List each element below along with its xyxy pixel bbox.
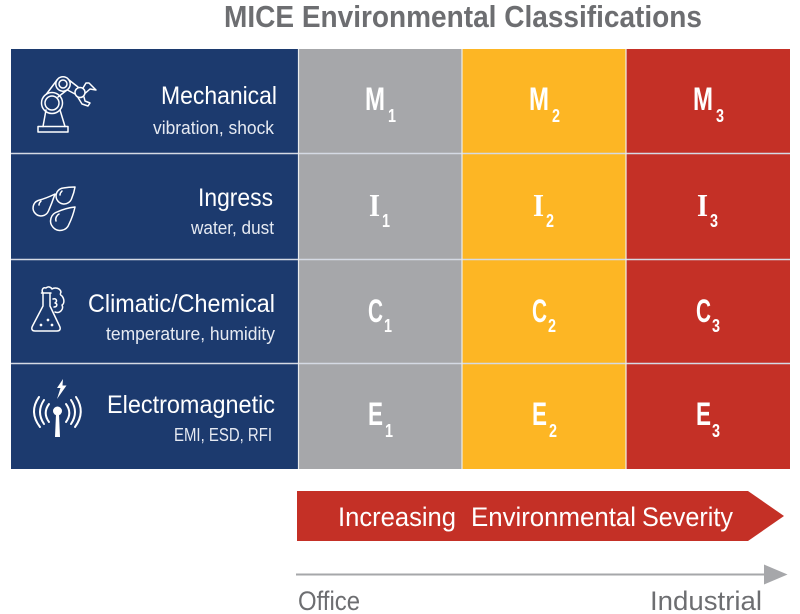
cell: I1: 1 — [382, 211, 390, 231]
cell: M3: M — [693, 81, 713, 117]
icon: flask — [32, 287, 64, 331]
cell: E3: 3 — [712, 421, 720, 441]
sublabel: water, dust: water, dust — [190, 218, 274, 238]
icon: antenna with lightning — [34, 379, 81, 437]
cell: I1 — [369, 187, 390, 231]
row: climatic/chemical — [32, 287, 275, 344]
cell: E3: E — [696, 396, 711, 432]
cell: E1: 1 — [385, 421, 393, 441]
cell: C2: 2 — [548, 316, 556, 336]
row: mechanical — [38, 77, 277, 138]
arrow: increasing environmental severity: Environmental — [471, 502, 636, 532]
icon: water drops — [33, 187, 75, 230]
row: ingress — [33, 184, 274, 238]
cell: I1: I — [369, 187, 380, 223]
column: level 1 — [298, 49, 462, 469]
sublabel: vibration, shock: vibration, shock — [153, 118, 275, 138]
arrow: increasing environmental severity: Increasing — [338, 502, 456, 532]
cell: I2: 2 — [546, 211, 554, 231]
cell: C1: 1 — [384, 316, 392, 336]
cell: I3 — [697, 187, 718, 231]
cell: C3: C — [696, 293, 711, 329]
cell: I3: 3 — [710, 211, 718, 231]
cell: I2 — [533, 187, 554, 231]
cell: M2: 2 — [552, 106, 560, 126]
cell: E1: E — [368, 396, 383, 432]
cell: E2: E — [532, 396, 547, 432]
matrix table — [11, 49, 790, 469]
cell: M3 — [693, 81, 724, 126]
cell: I2: I — [533, 187, 544, 223]
sublabel: EMI, ESD, RFI: EMI, ESD, RFI — [174, 425, 272, 445]
row: electromagnetic — [34, 379, 275, 445]
cell: M2: M — [529, 81, 549, 117]
sublabel: temperature, humidity: temperature, humidity — [106, 324, 275, 344]
cell: E2: 2 — [549, 421, 557, 441]
arrow: increasing environmental severity — [297, 491, 784, 541]
cell: M1: 1 — [388, 106, 396, 126]
cell: C2: C — [532, 293, 547, 329]
cell: C1: C — [368, 293, 383, 329]
column: categories — [11, 49, 298, 469]
label: ingress: Ingress — [198, 184, 273, 212]
cell: M1 — [365, 81, 396, 126]
cell: E1 — [368, 396, 393, 441]
cell: E2 — [532, 396, 557, 441]
cell: C3: 3 — [712, 316, 720, 336]
cell: I3: I — [697, 187, 708, 223]
cell: M3: 3 — [716, 106, 724, 126]
label: electromagnetic: Electromagnetic — [107, 391, 275, 419]
arrow: increasing environmental severity: Severity — [642, 502, 733, 532]
cell: M1: M — [365, 81, 385, 117]
arrow: office to industrial scale — [296, 566, 785, 583]
column: level 3 — [626, 49, 790, 469]
label: climatic/chemical: Climatic/Chemical — [88, 290, 275, 318]
title: MICE Environmental Classifications — [224, 0, 702, 34]
cell: M2 — [529, 81, 560, 126]
label: mechanical: Mechanical — [161, 82, 277, 110]
icon: robot arm — [38, 77, 96, 132]
column: level 2 — [462, 49, 626, 469]
